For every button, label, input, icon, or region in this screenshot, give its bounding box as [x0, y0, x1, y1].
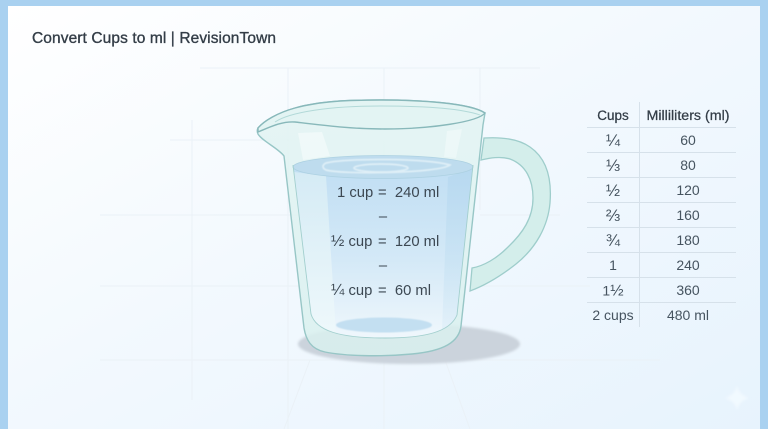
milliliters column: 360 [676, 282, 700, 298]
icon: measuring jug [257, 100, 550, 364]
jug labels [331, 185, 439, 299]
jug shadow [298, 324, 520, 364]
label: quarter cup: ¼ cup [331, 282, 372, 299]
milliliters column: 60 [680, 132, 696, 148]
cups column: ¼ [606, 131, 621, 150]
milliliters column [667, 132, 709, 323]
label: half cup: ½ cup [331, 233, 372, 250]
cups column: 1 [609, 257, 617, 273]
jug rim inner [275, 106, 480, 122]
label: 1 cup: 1 cup [337, 185, 373, 201]
cups column: ¾ [606, 231, 621, 250]
milliliters column: 180 [676, 232, 700, 248]
label: equals 120 ml: = 120 ml [378, 234, 439, 250]
milliliters column: 480 ml [667, 307, 709, 323]
jug upper highlight [298, 132, 330, 160]
cups column: ⅓ [606, 156, 620, 175]
jug bottom ellipse [336, 318, 432, 332]
water right shade [442, 168, 473, 330]
tick: – [379, 209, 388, 225]
cups column: 2 cups [592, 307, 634, 323]
water ripples [323, 159, 450, 173]
milliliters column: 80 [680, 157, 696, 173]
jug rim [258, 100, 485, 132]
jug handle [470, 138, 550, 291]
jug right highlight [444, 129, 462, 158]
jug inner wall [293, 165, 473, 338]
milliliters column: 240 [676, 257, 700, 273]
water surface [293, 156, 473, 178]
jug body [257, 100, 485, 356]
title: Convert Cups to ml | RevisionTown [32, 30, 276, 47]
cups column: ⅔ [606, 206, 620, 225]
cups column: ½ [606, 181, 620, 200]
cups column [592, 131, 634, 323]
tick: – [379, 258, 388, 274]
label: equals 60 ml: = 60 ml [378, 283, 431, 299]
water light band [294, 172, 336, 333]
label: equals 240 ml: = 240 ml [378, 185, 439, 201]
milliliters column: 160 [676, 207, 700, 223]
milliliters column: 120 [676, 182, 700, 198]
table header: Milliliters (ml) [646, 108, 730, 123]
cups column: 1½ [602, 282, 624, 300]
table header [597, 108, 730, 123]
water [293, 165, 473, 338]
table header: Cups [597, 108, 629, 123]
conversion table [587, 102, 736, 327]
icon: sparkle watermark [725, 386, 749, 410]
